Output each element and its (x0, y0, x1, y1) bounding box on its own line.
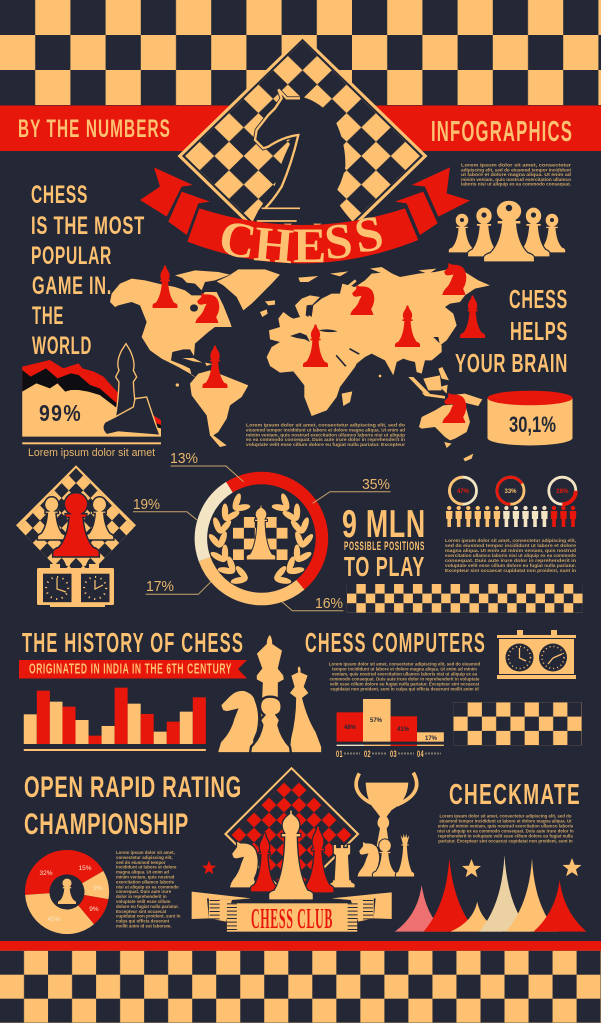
club ribbon (192, 892, 392, 932)
banner: originated in india: ORIGINATED IN INDIA IN THE 6TH CENTURY (29, 662, 232, 678)
title: chess: CHESS (215, 204, 387, 274)
heading: open rapid rating championship: OPEN RAPID RATING (24, 771, 242, 804)
text block: under people (445, 538, 577, 573)
text block: chess computers: cupidatat non proident, sunt in culpa qui officia deserunt mollit anim id (330, 686, 479, 692)
heading: chess helps your brain: HELPS (510, 316, 568, 346)
icon: trophy and small pieces (356, 773, 417, 877)
text block: narrow lorem: sed do eiusmod tempor (116, 860, 166, 865)
bar chart: chess computers (336, 699, 444, 759)
bar chart: chess computers: 01 (336, 749, 343, 759)
text block: chess computers (329, 662, 480, 692)
bottom red band (0, 941, 601, 951)
percent labels: 17% (146, 579, 174, 595)
small ring charts: 47% (457, 489, 470, 495)
banner: originated in india (19, 660, 247, 678)
icon: red star (202, 860, 216, 874)
text block: top right lorem: Lorem ipsum dolor sit amet, consectetur (461, 162, 571, 168)
afro-eurasia and australia (260, 267, 490, 461)
text block: under people: consequat. Duis aute irure dolor in reprehenderit in (445, 558, 576, 563)
caption: Lorem ipsum dolor sit amet (28, 447, 155, 459)
pawn (250, 697, 291, 753)
text block: chess computers: Lorem ipsum dolor sit amet, consectetur adipiscing elit, sed do eiusmod (329, 662, 480, 666)
bar chart: history (24, 688, 206, 751)
text block: under people: sed do eiusmod tempor incididunt ut labore et dolore (445, 543, 577, 548)
pie chart: 15% (78, 865, 92, 872)
text block: map lorem: ex ea commodo consequat. Duis aute irure dolor in reprehenderit in (246, 437, 405, 442)
left emblem: pawns on board and clock (16, 465, 136, 607)
icons: tan stars (462, 858, 582, 877)
text block: chess computers: velit esse cillum dolore eu fugiat nulla pariatur. Excepteur sint occaecat (330, 682, 480, 686)
checker block (453, 702, 582, 745)
donut chart with leader lines (133, 451, 390, 612)
bottom checker band (0, 951, 601, 1023)
pie chart: 45% (47, 916, 61, 923)
heading: 9 mln possible positions to play: 9 MLN (342, 503, 426, 546)
text block: narrow lorem: cupidatat non proident, sunt in (116, 914, 181, 919)
text block: map lorem (246, 422, 405, 447)
text block: narrow lorem: mollit anim id est laborum. (116, 924, 172, 928)
text block: narrow lorem: nisi ut aliquip ex ea commodo (116, 884, 179, 889)
text block: narrow lorem: Excepteur sint occaecat (116, 909, 167, 914)
percent labels: 19% (133, 497, 160, 513)
pie chart: 32% (39, 870, 53, 877)
bar chart: chess computers: 41% (397, 727, 410, 733)
text block: narrow lorem: Lorem ipsum dolor sit amet, (116, 850, 175, 855)
heading: open rapid rating championship (24, 771, 242, 841)
percent labels: 16% (315, 596, 343, 612)
heading: 9 mln possible positions to play: TO PLAY (344, 551, 425, 582)
text block: under people: Excepteur sint occaecat cupidatat non proident, sunt in (445, 568, 576, 573)
heading: 9 mln possible positions to play (342, 503, 426, 582)
text block: checkmate: nisi ut aliquip ex ea commodo consequat. Duis aute irure dolor in (437, 828, 574, 834)
bar chart: chess computers: 02 (364, 749, 371, 759)
header text: by the numbers: BY THE NUMBERS (18, 115, 171, 143)
title ribbon (140, 167, 470, 263)
percent labels: 35% (362, 477, 390, 493)
world map with red chess pieces (98, 263, 490, 461)
text block: chess computers: commodo consequat. Duis aute irure dolor in reprehenderit in voluptate (329, 676, 480, 682)
heading: open rapid rating championship: CHAMPIONSHIP (24, 808, 189, 841)
small ring charts (450, 477, 576, 504)
text block: checkmate (437, 814, 574, 844)
chess club emblem: CHESS CLUB (251, 904, 333, 935)
heading: chess is the most popular game in the world: POPULAR (31, 242, 112, 270)
knight (217, 690, 259, 753)
text block: checkmate: enim ad minim veniam, quis nostrud exercitation ullamco laboris (438, 824, 574, 828)
text block: chess computers: tempor incididunt ut labore et dolore magna aliqua. Ut enim ad minim (332, 666, 477, 672)
people pictogram (446, 506, 576, 527)
cylinder stat 30,1%: 30,1% (509, 412, 556, 437)
standing queen (115, 344, 138, 419)
heading: chess is the most popular game in the world: CHESS (31, 181, 88, 209)
chess club emblem (192, 767, 392, 935)
text block: narrow lorem: voluptate velit esse cillum (116, 899, 171, 904)
text block: under people: magna aliqua. Ut enim ad minim veniam, quis nostrud (445, 548, 576, 553)
queen (288, 665, 322, 753)
pie chart: 9% (89, 906, 99, 913)
text block: map lorem: minim veniam, quis nostrud exercitation ullamco laboris nisi ut aliquip (246, 432, 405, 437)
area chart: 99% (22, 344, 161, 444)
americas and greenland (98, 269, 280, 447)
text block: narrow lorem: incididunt ut labore et dolore (116, 865, 177, 870)
text block: checkmate: pariatur. Excepteur sint occaecat cupidatat non proident, sunt in (438, 838, 573, 844)
heading: chess is the most popular game in the world (31, 181, 145, 360)
text block: under people: voluptate velit esse cillum dolore eu fugiat nulla pariatur. (445, 563, 576, 568)
icon: chess clock (497, 630, 576, 679)
text block: checkmate: eiusmod tempor incididunt ut labore et dolore magna aliqua. Ut (439, 818, 572, 824)
heading: chess is the most popular game in the world: GAME IN. (32, 272, 112, 300)
bar chart: chess computers: 17% (425, 736, 438, 742)
chess clock (37, 564, 114, 607)
red board (224, 767, 360, 901)
cylinder stat 30,1% (488, 391, 572, 446)
text block: narrow lorem: dolore eu fugiat nulla pariatur. (116, 904, 179, 909)
laurel wreath (207, 492, 315, 585)
text block: checkmate: Lorem ipsum dolor sit amet, consectetur adipiscing elit, sed do (440, 814, 572, 818)
pie chart (25, 850, 109, 934)
text block: top right lorem: laboris nisi ut aliquip ex ea commodo consequat. (461, 182, 571, 187)
knight emblem (255, 89, 350, 222)
text block: chess computers: veniam, quis nostrud exercitation ullamco laboris nisi ut aliquip ex ea (332, 672, 478, 676)
text block: narrow lorem: consequat. Duis aute irure (116, 889, 172, 894)
text block: top right lorem: adipiscing elit, sed do eiusmod tempor incididunt (461, 167, 572, 172)
text block: under people: Lorem ipsum dolor sit amet, consectetur adipiscing elit, (445, 538, 576, 543)
heading: chess is the most popular game in the world: THE (32, 302, 64, 330)
fallen piece (103, 397, 160, 435)
text block: top right lorem (461, 162, 572, 187)
chess board emblem (178, 34, 428, 225)
red header ribbon (0, 106, 601, 151)
small ring charts: 33% (504, 489, 517, 495)
bar chart: chess computers: 57% (370, 718, 383, 724)
text block: narrow lorem: consectetur adipiscing elit, (116, 855, 173, 860)
heading: 9 mln possible positions to play: POSSIBLE POSITIONS (344, 540, 425, 553)
peaks chart (395, 855, 586, 932)
text block: narrow lorem: magna aliqua. Ut enim ad (116, 870, 169, 875)
text block: narrow lorem (116, 850, 181, 928)
center board and queen (233, 505, 288, 560)
percent labels: 13% (170, 451, 198, 467)
heading: chess helps your brain (455, 284, 568, 378)
text block: narrow lorem: minim veniam, quis nostrud (116, 874, 175, 880)
text block: map lorem: eiusmod tempor incididunt ut labore et dolore magna aliqua. Ut enim ad (246, 427, 405, 432)
heading: chess is the most popular game in the world: WORLD (32, 332, 92, 360)
text block: under people: exercitation ullamco laboris nisi ut aliquip ex ea commodo (445, 553, 576, 558)
chess pieces group (217, 633, 322, 753)
99 percent: 99% (39, 400, 82, 426)
text block: map lorem: Lorem ipsum dolor sit amet, consectetur adipiscing elit, sed do (246, 422, 405, 428)
heading: the history of chess: THE HISTORY OF CHESS (22, 627, 244, 658)
club pieces (229, 810, 355, 900)
checker strip (347, 584, 583, 613)
bar chart: chess computers: 03 (390, 749, 397, 759)
king (256, 633, 285, 753)
bar chart: chess computers: 48% (344, 725, 357, 731)
top checker band (0, 0, 601, 105)
text block: narrow lorem: exercitation ullamco laboris (116, 879, 175, 884)
text block: checkmate: reprehenderit in voluptate velit esse cillum dolore eu fugiat nulla (438, 834, 573, 838)
heading: chess is the most popular game in the world: IS THE MOST (31, 212, 145, 240)
text block: narrow lorem: dolor in reprehenderit in (116, 894, 167, 899)
pie chart: 9% (93, 885, 103, 892)
bar chart: chess computers: 04 (417, 749, 424, 759)
map pins (153, 263, 485, 423)
donut ring (201, 478, 322, 599)
leader lines (133, 466, 390, 611)
pawn group icon (448, 200, 566, 262)
percent labels (133, 451, 390, 612)
text block: top right lorem: minim veniam, quis nostrud exercitation ullamco (461, 177, 571, 182)
text block: map lorem: voluptate velit esse cillum dolore eu fugiat nulla pariatur. Excepteur (246, 442, 405, 447)
text block: narrow lorem: culpa qui officia deserunt (116, 919, 170, 924)
small ring charts: 28% (556, 489, 569, 495)
text block: top right lorem: ut labore et dolore magna aliqua. Ut enim ad (461, 172, 571, 177)
